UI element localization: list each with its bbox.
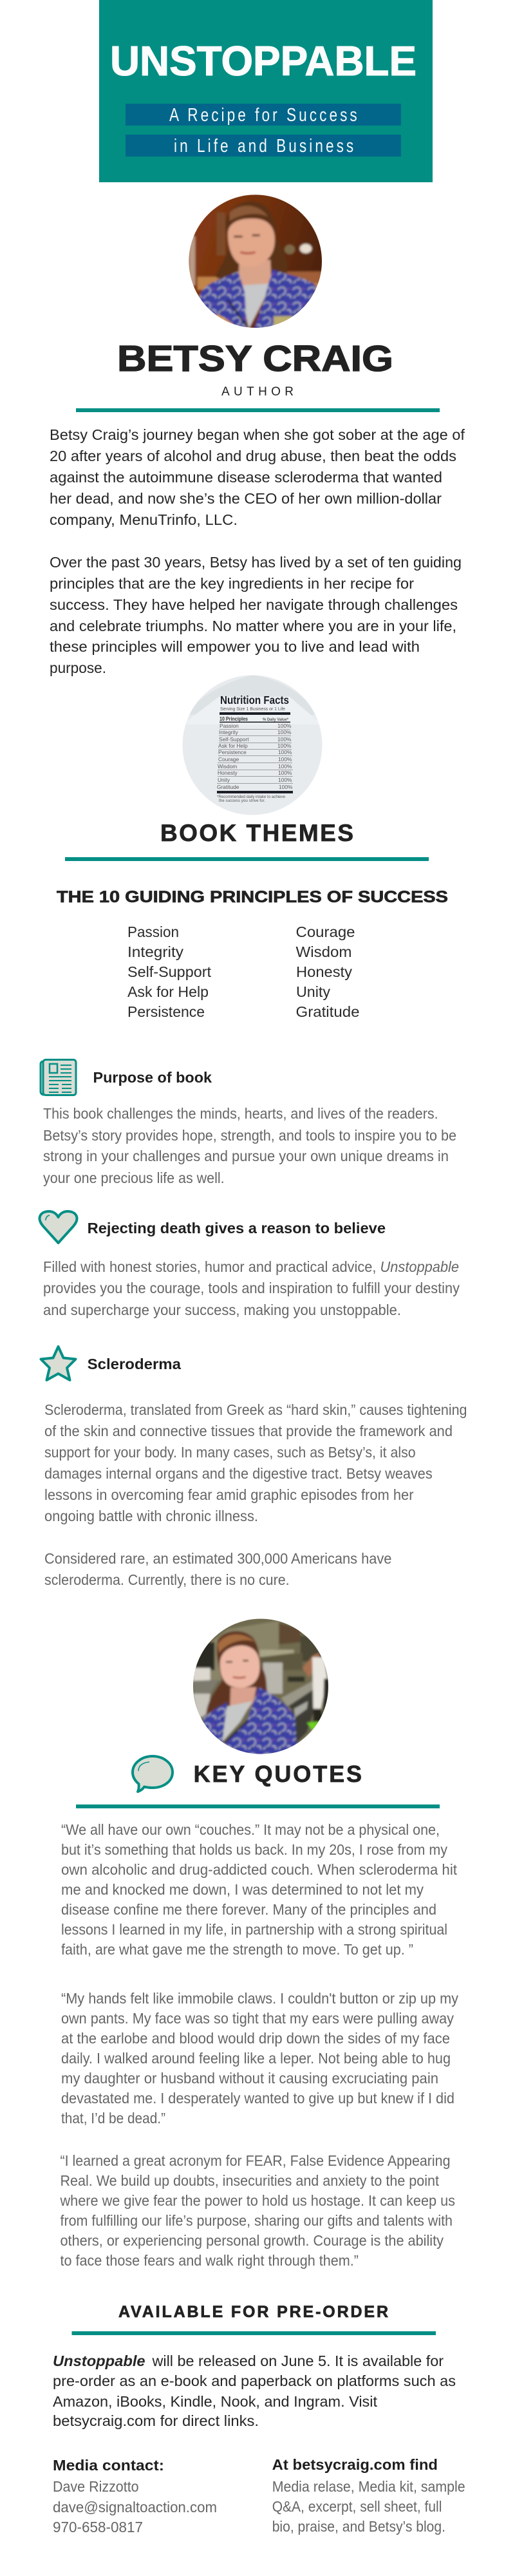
text: pre-order details xyxy=(53,2353,456,2429)
heading: key quotes: KEY QUOTES xyxy=(194,1761,362,1787)
nutrition facts label image: the success you strive for. xyxy=(219,799,265,803)
media contact: Media contact: xyxy=(53,2457,164,2474)
quote three: others, or experiencing personal growth. Courage is the ability xyxy=(61,2232,444,2249)
nutrition facts label image: Integrity xyxy=(219,729,239,735)
nutrition facts label image: Gratitude xyxy=(217,784,239,790)
principles list: right column: Gratitude xyxy=(296,1003,359,1020)
author biography: these principles will empower you to live and lead with xyxy=(50,638,420,655)
text: scleroderma xyxy=(44,1401,467,1588)
quote three: from fulfilling our life’s purpose, sharing our gifts and talents with xyxy=(61,2212,453,2229)
nutrition facts label image: 100% xyxy=(278,777,292,783)
nutrition facts label image: 100% xyxy=(278,770,292,776)
text: rejecting death xyxy=(43,1258,460,1318)
text: purpose of book: Betsy’s story provides hope, strength, and tools to inspire you to be xyxy=(43,1127,456,1144)
nutrition facts label image: *Recommended daily intake to achieve xyxy=(217,795,286,799)
nutrition facts label image: 100% xyxy=(277,736,292,743)
quote one: lessons I learned in my life, in partnership with a strong spiritual xyxy=(61,1921,447,1938)
text: pre-order details: Unstoppable xyxy=(53,2353,145,2369)
nutrition facts label image: 10 Principles xyxy=(220,716,248,722)
author name: BETSY CRAIG xyxy=(117,338,393,379)
text: scleroderma: damages internal organs and the digestive tract. Betsy weaves xyxy=(44,1465,433,1482)
subtitle bar: line one xyxy=(126,104,401,126)
quote three xyxy=(60,2152,455,2269)
quote one: “We all have our own “couches.” It may not be a physical one, xyxy=(61,1821,440,1838)
quote one xyxy=(61,1821,457,1958)
principles list: right column: Courage xyxy=(296,923,355,940)
nutrition facts label image: Ask for Help xyxy=(218,743,248,749)
nutrition facts label image: Persistence xyxy=(218,749,247,755)
quote two: daily. I walked around feeling like a leper. Not being able to hug xyxy=(61,2050,451,2067)
subtitle bar: line two xyxy=(126,135,401,156)
quote three: where we give fear the power to hold us hostage. It can keep us xyxy=(60,2192,455,2209)
website resources xyxy=(272,2456,465,2535)
text: scleroderma: Scleroderma, translated from Greek as “hard skin,” causes tightening xyxy=(44,1401,467,1418)
author biography: Betsy Craig’s journey began when she got sober at the age of xyxy=(50,426,465,443)
text: pre-order details: Amazon, iBooks, Kindle, Nook, and Ingram. Visit xyxy=(53,2393,377,2410)
media contact: 970-658-0817 xyxy=(53,2519,143,2535)
text: scleroderma: lessons in overcoming fear amid graphic episodes from her xyxy=(44,1486,414,1503)
icon: star xyxy=(41,1347,76,1380)
quote three: Real. We build up doubts, insecurities and anxiety to the point xyxy=(61,2172,439,2189)
text: scleroderma: of the skin and connective tissues that provide the framework and xyxy=(44,1423,453,1439)
website resources: Q&A, excerpt, sell sheet, full xyxy=(272,2498,442,2515)
quote three: to face those fears and walk right through them.” xyxy=(61,2252,359,2269)
nutrition facts label image: Passion xyxy=(220,723,239,729)
principles list: right column: Unity xyxy=(296,983,330,1000)
author biography xyxy=(50,426,465,676)
quote one: me and knocked me down, I was determined to not let my xyxy=(61,1881,424,1898)
quote two: own pants. My face was so tight that my ears were pulling away xyxy=(61,2010,454,2027)
nutrition facts label image: Wisdom xyxy=(218,763,237,770)
nutrition facts label image: 100% xyxy=(277,743,292,749)
nutrition facts label image: 100% xyxy=(277,729,292,735)
nutrition facts label image: 100% xyxy=(277,723,292,729)
text: rejecting death: Filled with honest stories, humor and practical advice, Unstoppable xyxy=(43,1258,459,1275)
nutrition facts label image: Courage xyxy=(218,756,239,762)
subtitle bar: line two: in Life and Business xyxy=(174,135,353,156)
quote two: my daughter or husband without it causing excruciating pain xyxy=(61,2070,438,2087)
heading: scleroderma: Scleroderma xyxy=(88,1356,182,1372)
heading: available for pre-order: AVAILABLE FOR PRE-ORDER xyxy=(118,2303,388,2321)
website resources: bio, praise, and Betsy’s blog. xyxy=(272,2518,445,2535)
quote two: at the earlobe and blood would drip down the sides of my face xyxy=(61,2030,450,2047)
nutrition facts label image: 100% xyxy=(278,763,292,770)
nutrition facts label image: % Daily Value* xyxy=(263,718,289,722)
quote two: devastated me. I desperately wanted to give up but knew if I did xyxy=(61,2090,454,2107)
author portrait photo xyxy=(187,193,324,330)
icon: speech bubble xyxy=(133,1756,173,1792)
text: purpose of book: your one precious life as well. xyxy=(43,1170,225,1186)
text: scleroderma: Considered rare, an estimated 300,000 Americans have xyxy=(44,1550,391,1567)
text: rejecting death: and supercharge your success, making you unstoppable. xyxy=(43,1302,401,1318)
author biography: company, MenuTrinfo, LLC. xyxy=(50,511,238,528)
quote one: faith, are what gave me the strength to move. To get up. ” xyxy=(61,1941,413,1958)
text: pre-order details: pre-order as an e-book and paperback on platforms such as xyxy=(53,2372,456,2389)
heading: guiding principles: THE 10 GUIDING PRINCIPLES OF SUCCESS xyxy=(57,888,448,906)
author biography: against the autoimmune disease scleroderma that wanted xyxy=(50,469,442,486)
subtitle bar: line one: A Recipe for Success xyxy=(169,104,357,126)
icon: newspaper xyxy=(41,1060,76,1095)
author biography: purpose. xyxy=(50,659,106,676)
text: scleroderma: ongoing battle with chronic illness. xyxy=(44,1508,258,1524)
book title: UNSTOPPABLE xyxy=(110,37,417,84)
nutrition facts label image: 100% xyxy=(278,749,292,755)
media contact: Dave Rizzotto xyxy=(53,2478,139,2495)
nutrition facts label image: Nutrition Facts xyxy=(220,694,289,706)
quote two: that, I’d be dead.” xyxy=(61,2110,165,2126)
author biography: Over the past 30 years, Betsy has lived by a set of ten guiding xyxy=(50,554,462,571)
text: rejecting death: provides you the courage, tools and inspiration to fulfill your destiny xyxy=(43,1280,460,1296)
principles list: left column xyxy=(127,923,211,1020)
principles list: right column: Wisdom xyxy=(296,943,351,960)
quote one: disease confine me there forever. Many of the principles and xyxy=(61,1901,436,1918)
quote one: own alcoholic and drug-addicted couch. When scleroderma hit xyxy=(61,1861,457,1878)
heading: purpose of book: Purpose of book xyxy=(93,1069,212,1086)
principles list: right column: Honesty xyxy=(296,963,352,980)
text: scleroderma: scleroderma. Currently, there is no cure. xyxy=(44,1571,290,1588)
nutrition facts label image: Honesty xyxy=(218,770,238,776)
quote two: “My hands felt like immobile claws. I couldn't button or zip up my xyxy=(61,1990,458,2007)
author biography: and celebrate triumphs. No matter where you are in your life, xyxy=(50,618,456,634)
website resources: Media relase, Media kit, sample xyxy=(272,2478,465,2495)
nutrition facts label image xyxy=(182,675,322,815)
author biography: her dead, and now she’s the CEO of her own million-dollar xyxy=(50,490,442,507)
text: pre-order details: betsycraig.com for direct links. xyxy=(53,2412,259,2429)
text: purpose of book: strong in your challenges and pursue your own unique dreams in xyxy=(43,1148,449,1164)
nutrition facts label image: Serving Size 1 Business or 1 Life xyxy=(220,706,285,712)
book cover banner xyxy=(99,0,433,182)
author role: AUTHOR xyxy=(221,385,294,399)
heading: book themes: BOOK THEMES xyxy=(160,820,353,846)
principles list: right column xyxy=(296,923,359,1020)
principles list: left column: Passion xyxy=(127,923,179,940)
principles list: left column: Ask for Help xyxy=(127,983,209,1000)
text: purpose of book xyxy=(43,1105,456,1186)
text: purpose of book: This book challenges the minds, hearts, and lives of the readers. xyxy=(43,1105,438,1122)
author biography: success. They have helped her navigate through challenges xyxy=(50,596,458,613)
principles list: left column: Self-Support xyxy=(127,963,211,980)
principles list: left column: Integrity xyxy=(127,943,183,960)
author biography: 20 after years of alcohol and drug abuse, then beat the odds xyxy=(50,448,456,464)
quote one: but it’s something that holds us back. In my 20s, I rose from my xyxy=(61,1841,447,1858)
principles list: left column: Persistence xyxy=(127,1003,205,1020)
text: pre-order details: will be released on June 5. It is available for xyxy=(152,2353,444,2369)
heading: rejecting death: Rejecting death gives a reason to believe xyxy=(88,1220,386,1236)
nutrition facts label image: Self-Support xyxy=(219,736,249,743)
author biography: principles that are the key ingredients in her recipe for xyxy=(50,575,414,592)
media contact: dave@signaltoaction.com xyxy=(53,2499,217,2515)
quote three: “I learned a great acronym for FEAR, False Evidence Appearing xyxy=(61,2152,451,2169)
nutrition facts label image: 100% xyxy=(278,756,292,762)
icon: heart xyxy=(40,1211,77,1243)
quote two xyxy=(61,1990,458,2126)
website resources: At betsycraig.com find xyxy=(272,2456,438,2473)
nutrition facts label image: 100% xyxy=(279,784,293,790)
nutrition facts label image: Unity xyxy=(218,777,230,783)
media contact xyxy=(53,2457,217,2535)
kitchen portrait photo xyxy=(191,1616,330,1756)
text: scleroderma: support for your body. In many cases, such as Betsy’s, it also xyxy=(44,1444,416,1461)
